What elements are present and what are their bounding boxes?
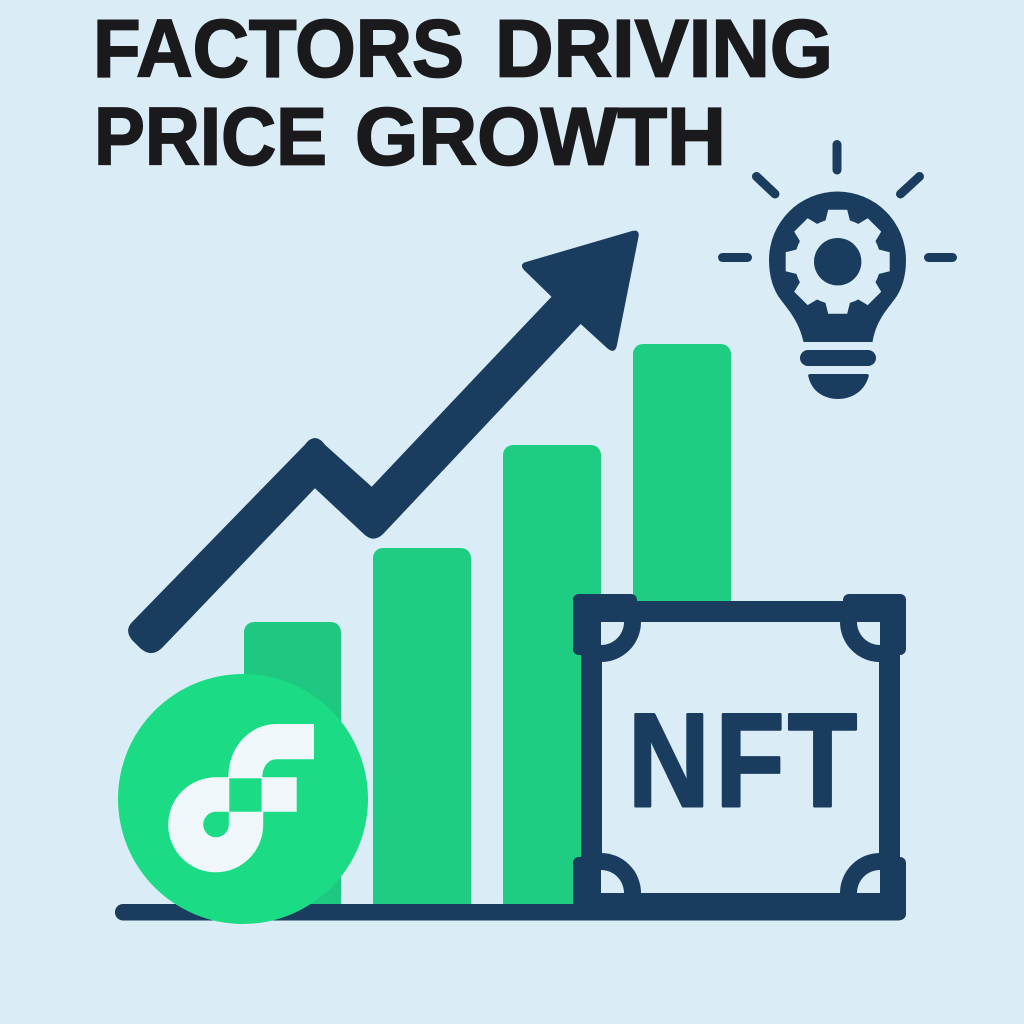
- title: [93, 4, 833, 182]
- icon: lightbulb with gear: [722, 144, 952, 399]
- title: GROWTH: [355, 92, 726, 182]
- NFT label: NFT: [628, 686, 857, 835]
- icon: Flow logo coin: [118, 674, 368, 924]
- arrow: rising trend: [128, 231, 639, 653]
- title: FACTORS: [93, 4, 464, 94]
- corner brackets: [573, 594, 906, 920]
- icon: NFT frame: [573, 594, 906, 920]
- baseline: [115, 904, 906, 920]
- bar chart: [244, 344, 731, 912]
- title: DRIVING: [495, 4, 833, 94]
- title: PRICE: [94, 92, 327, 182]
